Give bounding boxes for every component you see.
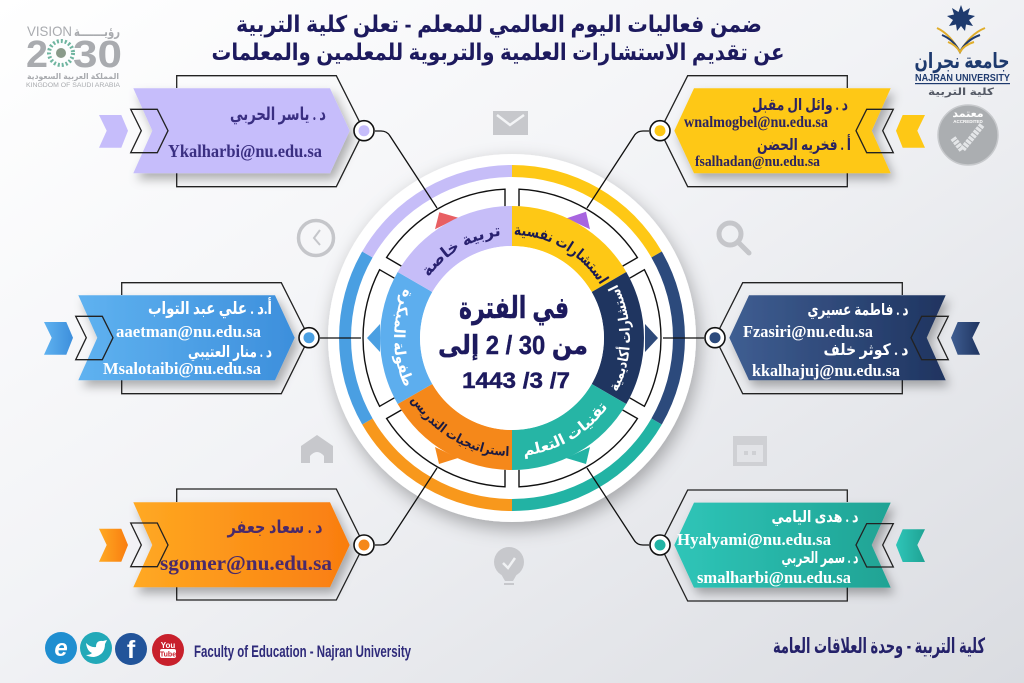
centre date text: في الفترة [459, 292, 569, 326]
connector lines [320, 131, 704, 545]
panel: lavender: د . ياسر الحربي [230, 104, 326, 125]
logo: Vision 2030: 30 [73, 34, 122, 76]
panel: yellow: د . وائل ال مقبل [752, 97, 848, 114]
logo: Vision 2030: 2 [26, 34, 48, 76]
logo: Vision 2030: المملكة العربية السعودية [27, 72, 119, 81]
icon: envelope [493, 111, 528, 135]
footer: english caption: Faculty of Education - Najran University [194, 642, 411, 661]
centre date text: 7/ 3/ 1443 [462, 368, 570, 393]
panel: orange [99, 489, 374, 600]
badge: accredited [938, 105, 998, 165]
badge: accredited: معتمد [952, 108, 984, 120]
label: special education: تربية خاصة [424, 228, 500, 276]
panel: blue: aaetman@nu.edu.sa [116, 322, 261, 341]
panel: teal: smalharbi@nu.edu.sa [697, 568, 851, 587]
logo: Vision 2030: رؤيـــــــة [74, 24, 120, 39]
panel: orange: د . سعاد جعفر [227, 517, 322, 538]
panel: orange: sgomer@nu.edu.sa [160, 551, 332, 575]
logo: Najran University: كلية التربية [928, 87, 994, 98]
panel: blue: د . منار العتيبي [188, 344, 272, 362]
label: learning technologies: تقنيات التعلم [524, 403, 606, 460]
panel: blue [44, 283, 319, 394]
icon: home [301, 435, 333, 463]
panel: yellow: أ . فخريه الحضن [757, 134, 851, 154]
title: عن تقديم الاستشارات العلمية والتربوية للمعلمين والمعلمات [212, 39, 784, 66]
icon: clock [298, 220, 334, 256]
logo: Vision 2030: VISION [27, 23, 72, 39]
outer ring [339, 165, 685, 511]
panel: teal: Hyalyami@nu.edu.sa [677, 530, 831, 549]
panel: navy: Fzasiri@nu.edu.sa [743, 322, 873, 341]
panel: teal [650, 490, 925, 601]
logo: Vision 2030 [26, 23, 122, 89]
badge: accredited: ACCREDITED [953, 119, 983, 124]
panel: yellow [650, 76, 925, 187]
logo: Najran University: NAJRAN UNIVERSITY [915, 73, 1010, 84]
thin outlined arcs [363, 189, 661, 487]
panel: navy [705, 283, 980, 394]
panel: blue: Msalotaibi@nu.edu.sa [103, 359, 261, 378]
logo: Najran University [914, 5, 1010, 98]
panel: lavender [99, 76, 374, 187]
panel: yellow: fsalhadan@nu.edu.sa [695, 154, 820, 170]
panel: navy: kkalhajuj@nu.edu.sa [752, 361, 900, 380]
panel: lavender: Ykalharbi@nu.edu.sa [168, 141, 322, 161]
icon: magnifier [719, 223, 749, 253]
panel: navy: د . كوثر خلف [824, 342, 908, 359]
label: psychological consultations: استشارات نفسية [514, 227, 610, 284]
icon: youtube: Tube [160, 652, 176, 658]
icon: youtube [152, 634, 184, 666]
label: early childhood: طفولة المبكرة [392, 290, 412, 386]
icon: internet explorer: e [54, 635, 68, 662]
label: teaching strategies: استراتيجيات التدريس [410, 399, 509, 456]
wheel [320, 150, 709, 539]
panel: blue: أ.د . علي عبد التواب [148, 297, 272, 319]
icon: facebook: f [127, 636, 136, 664]
pointer triangles [367, 212, 658, 464]
inner coloured segments [380, 206, 644, 470]
icon: twitter [80, 632, 112, 664]
icon: youtube: You [161, 641, 175, 650]
title: ضمن فعاليات اليوم العالمي للمعلم - تعلن كلية التربية [236, 11, 762, 38]
panel: teal: د . هدى اليامي [772, 509, 858, 527]
panel: navy: د . فاطمة عسيري [808, 302, 908, 320]
icon: calendar [733, 436, 767, 466]
icon: lightbulb [494, 547, 524, 585]
title [212, 11, 784, 66]
icons: social media [45, 632, 184, 666]
panel: teal: د . سمر الحربي [782, 550, 858, 568]
logo: Vision 2030: KINGDOM OF SAUDI ARABIA [26, 83, 120, 89]
centre date text [420, 246, 604, 430]
centre date text: من 30 / 2 إلى [438, 330, 588, 361]
label: academic consultations: استشارات أكاديمية [608, 284, 633, 391]
panel: yellow: wnalmogbel@nu.edu.sa [684, 114, 828, 131]
